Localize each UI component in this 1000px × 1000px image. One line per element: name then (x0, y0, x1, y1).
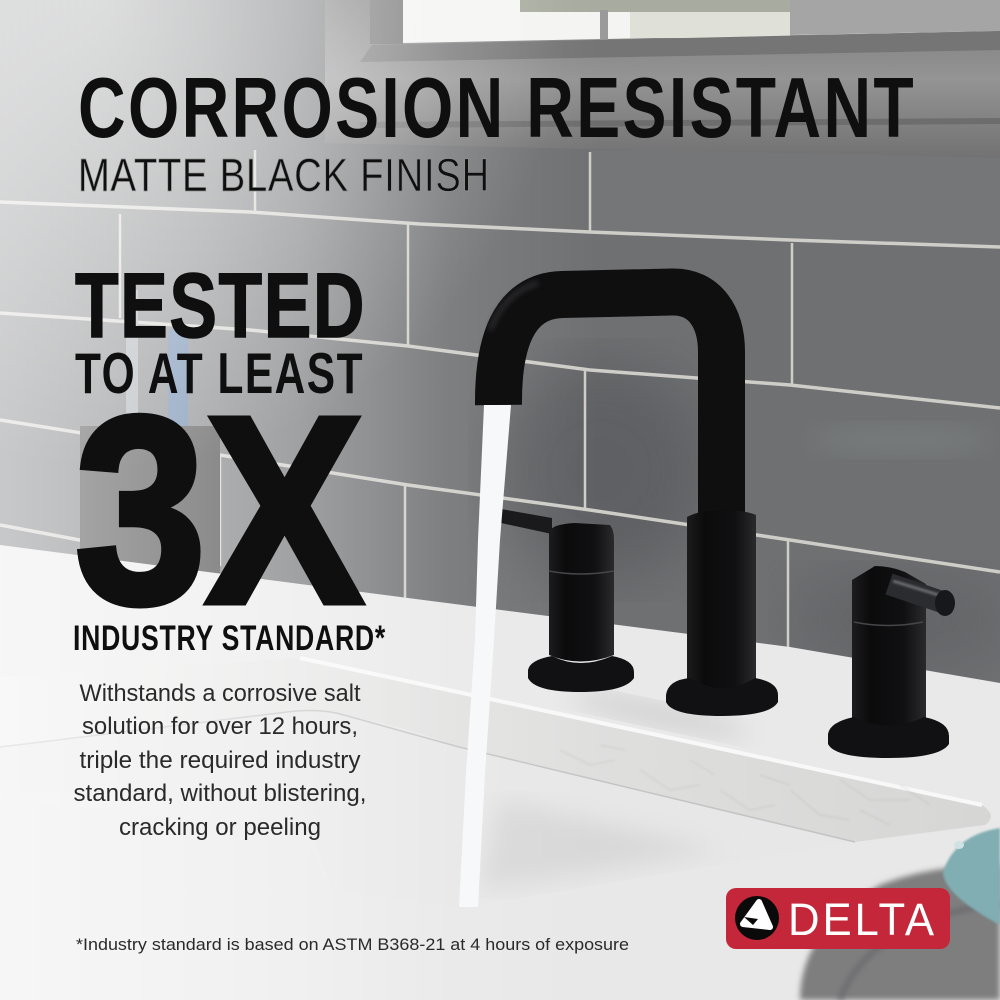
marble lip (0, 658, 991, 842)
marble veins (560, 745, 930, 825)
front counter (0, 800, 1000, 1000)
heading: to at least: TO AT LEAST (75, 342, 364, 406)
faucet shadows on counter (569, 685, 751, 745)
icon: delta emblem (735, 896, 779, 940)
body text: standard, without blistering, (74, 780, 366, 807)
left handle (549, 523, 614, 662)
right handle (852, 566, 926, 726)
tile wall shading (490, 150, 1000, 670)
heading: tested: TESTED (75, 255, 366, 357)
towel and soap (800, 828, 1000, 1000)
basin (0, 711, 855, 908)
subtitle: MATTE BLACK FINISH (78, 149, 490, 201)
body text: solution for over 12 hours, (82, 713, 358, 740)
heading: industry standard: INDUSTRY STANDARD* (73, 618, 386, 658)
footnote: *Industry standard is based on ASTM B368-21 at 4 hours of exposure (76, 936, 629, 954)
body text: triple the required industry (80, 747, 360, 774)
heading: 3X: 3X (75, 362, 364, 659)
left base disk (528, 656, 634, 692)
cup and toothbrush (80, 290, 220, 614)
right base disk (828, 717, 949, 758)
logo: Delta (726, 888, 950, 949)
sink and marble lip (0, 658, 1000, 1000)
right lever (889, 584, 945, 603)
faucet (490, 283, 955, 758)
left handle lever (501, 509, 552, 534)
tile grout lines (0, 150, 1000, 672)
wordmark: DELTA (788, 894, 937, 945)
center base disk (666, 678, 778, 716)
window and sill (325, 0, 1000, 158)
body text: cracking or peeling (119, 814, 321, 841)
countertop (0, 545, 1000, 1000)
body text (74, 680, 366, 841)
center column (687, 510, 756, 696)
water stream (459, 405, 511, 907)
body text: Withstands a corrosive salt (80, 680, 361, 707)
spout (498, 292, 722, 520)
